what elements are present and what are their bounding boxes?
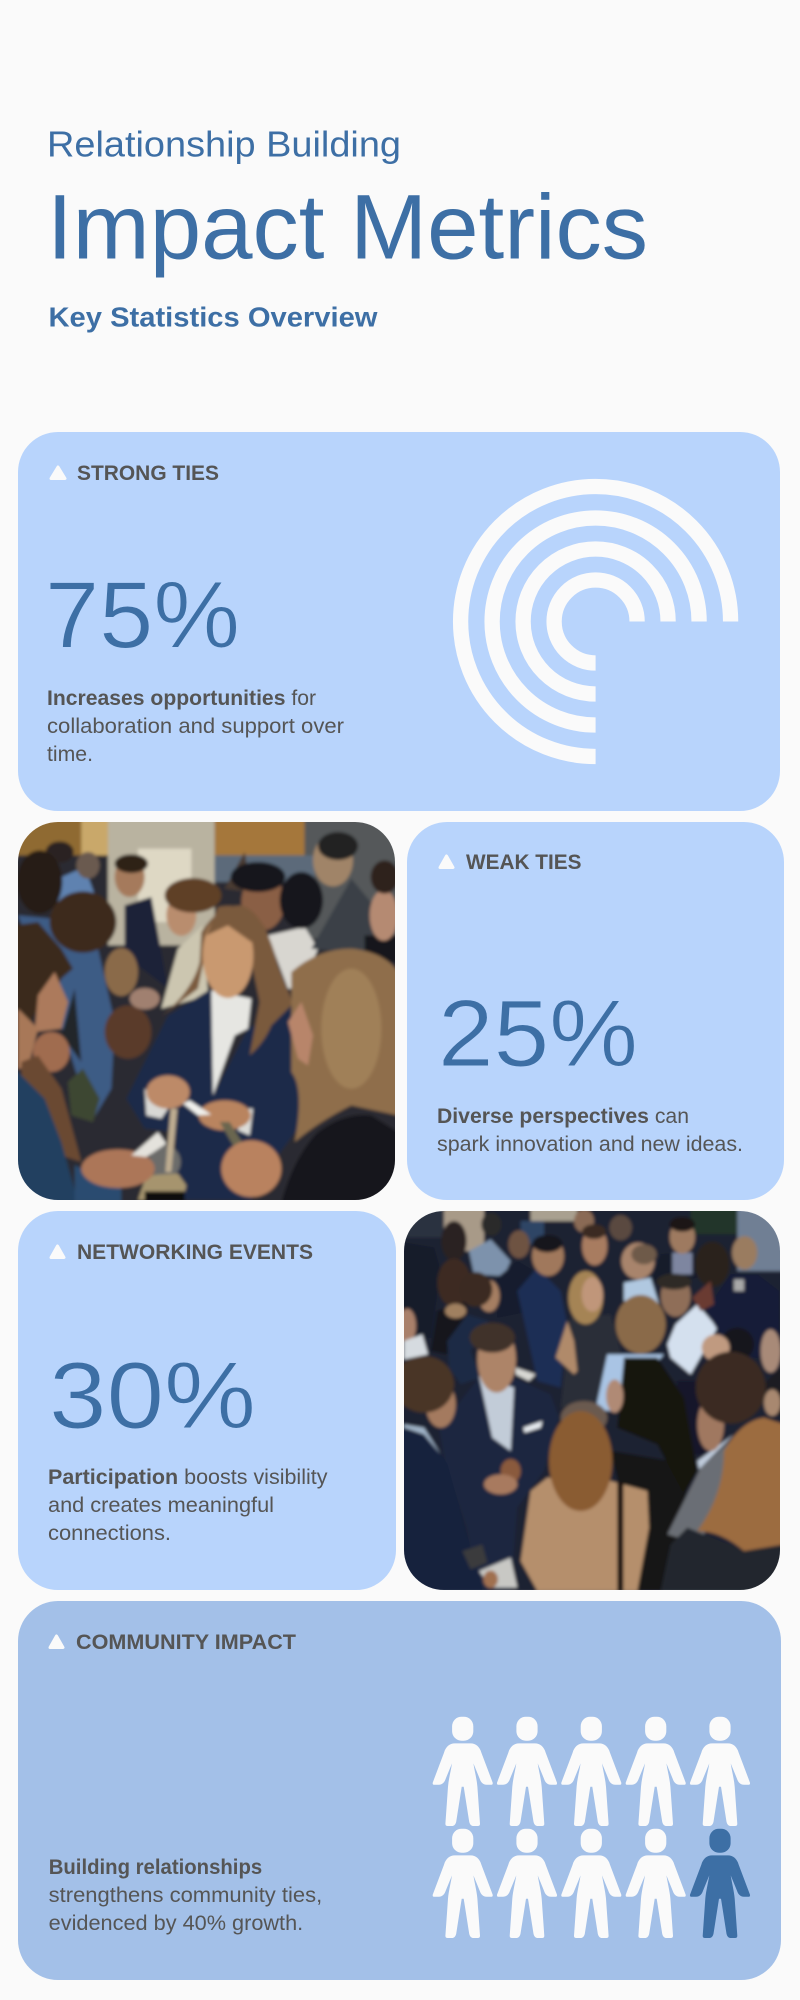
description: and creates meaningful (48, 1494, 274, 1517)
header (47, 124, 648, 332)
description (49, 1856, 322, 1935)
pictogram: ten people, one highlighted (433, 1717, 750, 1938)
photo: crowd at networking event (394, 1208, 785, 1592)
icon: triangle (51, 467, 65, 478)
subtitle: Key Statistics Overview: Key Statistics Overview (48, 302, 378, 332)
description: Increases opportunities for (47, 687, 316, 710)
icon: triangle (50, 1636, 63, 1648)
photo: woman exchanging business cards (15, 819, 401, 1203)
icon: triangle (51, 1246, 64, 1258)
label: networking events: NETWORKING EVENTS (77, 1241, 313, 1264)
panel: networking events (18, 1211, 396, 1590)
description: connections. (48, 1522, 171, 1545)
description: time. (47, 743, 93, 766)
label: strong ties: STRONG TIES (77, 462, 219, 485)
description: Building relationships (49, 1856, 262, 1879)
label: community impact: COMMUNITY IMPACT (76, 1631, 296, 1654)
stat: 75%: 75% (45, 562, 240, 668)
description: evidenced by 40% growth. (49, 1912, 303, 1935)
eyebrow: Relationship Building: Relationship Building (47, 124, 401, 164)
stat: 30%: 30% (49, 1343, 256, 1449)
title: Impact Metrics: Impact Metrics (47, 176, 648, 278)
description: strengthens community ties, (49, 1884, 322, 1907)
panel: weak ties (407, 822, 784, 1200)
panel: community impact (18, 1601, 781, 1980)
description: collaboration and support over (47, 715, 344, 738)
description (437, 1105, 743, 1156)
stat: 25%: 25% (438, 981, 638, 1087)
description (48, 1466, 328, 1545)
description (47, 687, 344, 766)
label: weak ties: WEAK TIES (466, 851, 582, 874)
chart: concentric arcs (461, 486, 731, 756)
panel: strong ties (18, 432, 780, 811)
description: spark innovation and new ideas. (437, 1133, 743, 1156)
icon: triangle (440, 856, 453, 868)
description: Diverse perspectives can (437, 1105, 689, 1128)
description: Participation boosts visibility (48, 1466, 328, 1489)
